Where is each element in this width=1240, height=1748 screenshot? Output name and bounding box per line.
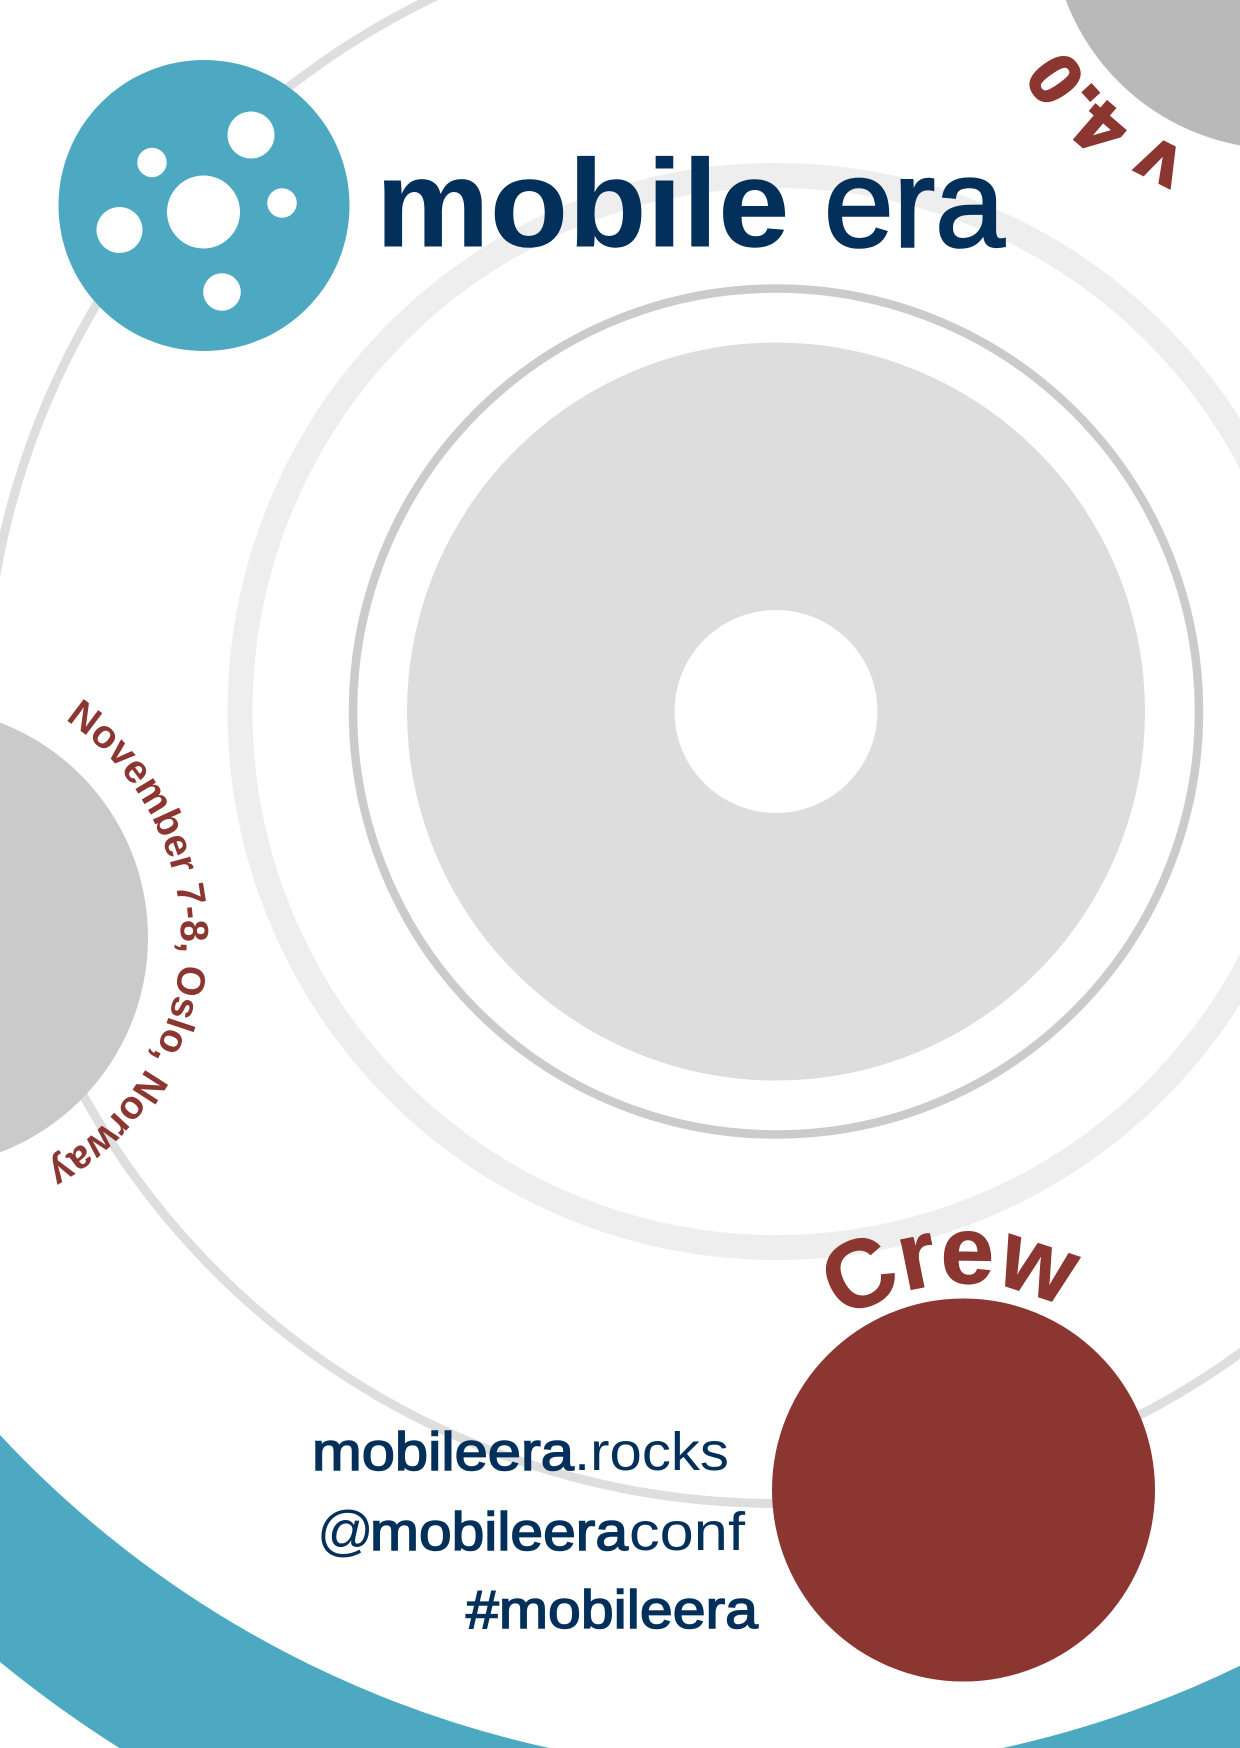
website: mobileera — [312, 1422, 575, 1482]
corner circle: top right — [1051, 0, 1240, 149]
twitter handle — [317, 1499, 746, 1562]
hashtag: #mobileera — [466, 1580, 759, 1640]
medium ring — [353, 288, 1199, 1134]
teal outer band — [0, 1435, 1240, 1748]
website: .rocks — [574, 1422, 729, 1482]
date and location: November 7-8, Oslo, Norway — [52, 699, 208, 1185]
light wide ring — [240, 176, 1240, 1248]
crew circle — [772, 1298, 1155, 1682]
central gray disc with white hole — [407, 342, 1145, 1080]
crew label: Crew — [826, 1231, 1082, 1308]
website — [312, 1422, 729, 1482]
logo wordmark: mobile — [376, 134, 790, 274]
logo wordmark — [376, 134, 1005, 274]
logo wordmark: era — [824, 134, 1005, 274]
side circle: left — [0, 708, 148, 1168]
version label: v 4.0 — [1029, 56, 1176, 190]
logo icon — [58, 60, 350, 351]
twitter handle: conf — [629, 1502, 746, 1562]
contact links — [312, 1422, 759, 1640]
twitter handle: mobileera — [370, 1502, 629, 1562]
twitter handle: @ — [317, 1499, 374, 1562]
